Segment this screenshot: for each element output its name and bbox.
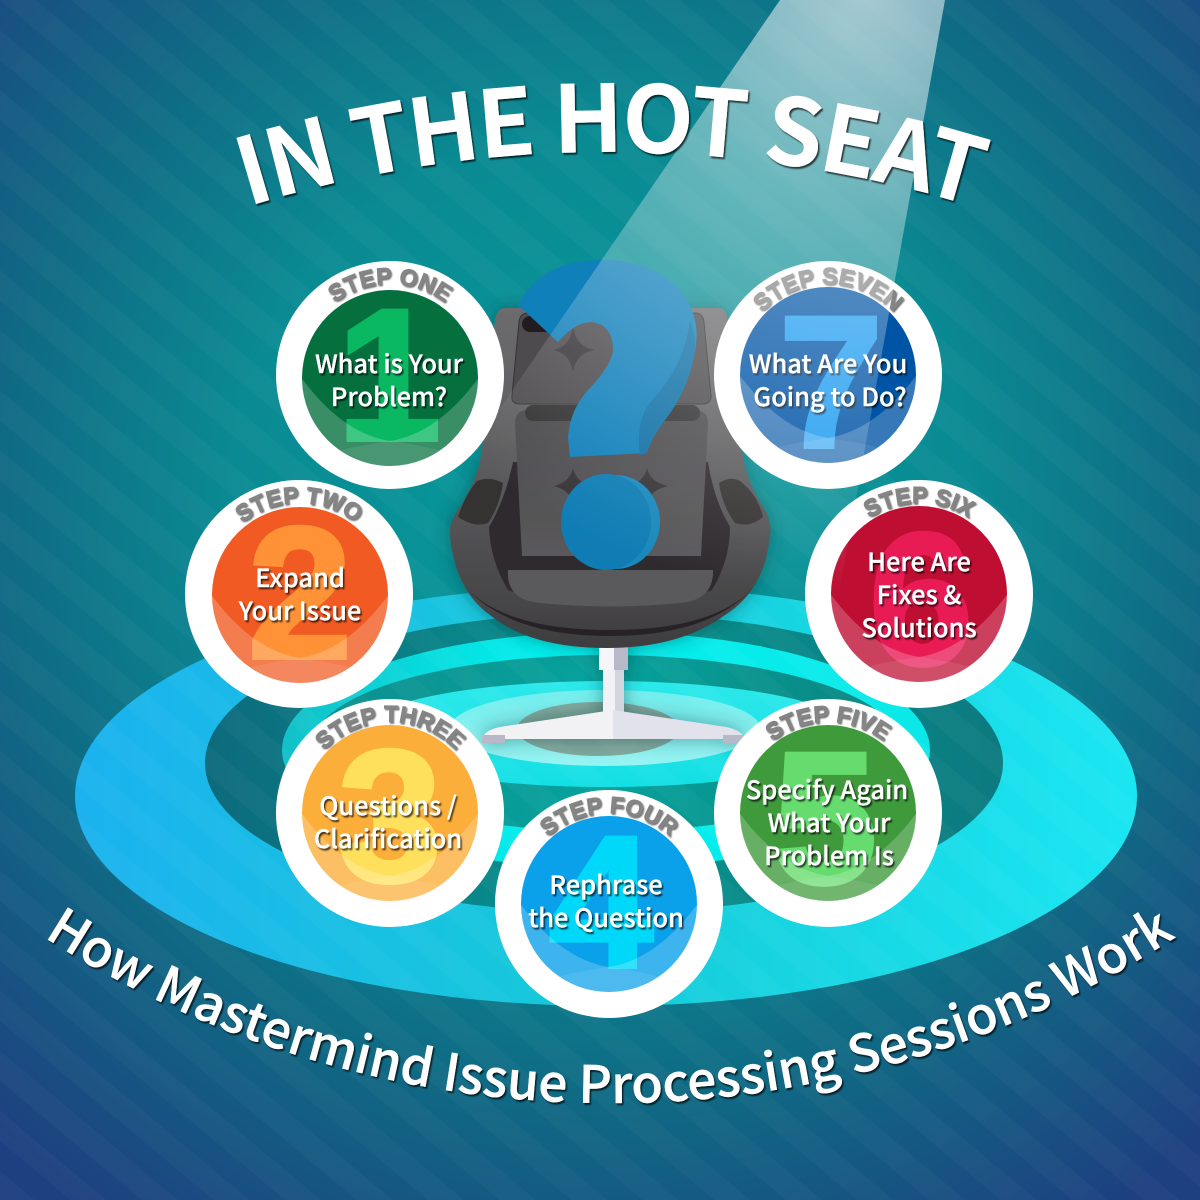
step 1 circle (276, 261, 504, 489)
chair (450, 308, 770, 743)
chair headrest (512, 313, 711, 404)
numeral 2: 2 (248, 488, 352, 698)
numeral 6: 6 (869, 494, 973, 704)
numeral 5: 5 (773, 713, 877, 923)
step 6 text: Fixes & (877, 576, 961, 612)
step 2 circle (185, 480, 413, 708)
step 6 circle (805, 480, 1033, 708)
numeral 1: 1 (337, 270, 441, 480)
right armrest (719, 479, 763, 525)
step 7 text: What Are You (749, 345, 907, 381)
chair lower rim (465, 587, 754, 636)
step 2 arc label: STEP TWO (236, 486, 364, 524)
numeral 4: 4 (549, 797, 653, 1007)
step 2 text: Your Issue (238, 592, 361, 628)
step 3 text: Clarification (314, 820, 462, 856)
question mark stem (518, 260, 697, 457)
step 4 text: the Question (528, 899, 684, 935)
chair shell (450, 308, 770, 648)
chair headrest slot (525, 405, 700, 421)
step 4 arc label: STEP FOUR (540, 796, 680, 839)
chair cavity (489, 462, 730, 603)
title: IN THE HOT SEAT (236, 82, 993, 206)
step 4 circle (495, 790, 723, 1018)
question mark dot side (572, 475, 660, 569)
numeral 7: 7 (779, 277, 883, 487)
chair seat (508, 570, 713, 606)
chair cushion (515, 410, 708, 556)
step 7 circle (714, 261, 942, 489)
numeral 3: 3 (338, 711, 442, 921)
spotlight beam (300, 0, 945, 700)
step 4 text: Rephrase (549, 866, 663, 902)
step 1 text: Problem? (331, 378, 447, 414)
step 5 arc label: STEP FIVE (766, 706, 894, 743)
step 2 text: Expand (255, 559, 345, 595)
concentric floor rings (75, 586, 1137, 1006)
step 3 circle (276, 699, 504, 927)
tufting stars (553, 327, 668, 504)
left armrest (458, 479, 503, 525)
question mark dot (561, 474, 651, 570)
step 5 text: Problem Is (764, 837, 894, 873)
step 7 text: Going to Do? (753, 378, 907, 414)
question mark (518, 260, 697, 570)
step 5 text: Specify Again (746, 771, 908, 807)
step 3 arc label: STEP THREE (316, 705, 468, 752)
question mark side shade (639, 320, 695, 455)
step 7 arc label: STEP SEVEN (754, 267, 906, 314)
step 5 circle (714, 699, 942, 927)
step 6 text: Solutions (861, 609, 977, 645)
subtitle: How Mastermind Issue Processing Sessions Work (48, 907, 1178, 1106)
step 1 arc label: STEP ONE (328, 268, 455, 304)
step 5 text: What Your (768, 804, 891, 840)
step 3 text: Questions / (319, 787, 457, 823)
chair base (482, 646, 745, 743)
step 6 arc label: STEP SIX (864, 486, 978, 520)
step 1 text: What is Your (315, 345, 464, 381)
step 6 text: Here Are (867, 543, 971, 579)
